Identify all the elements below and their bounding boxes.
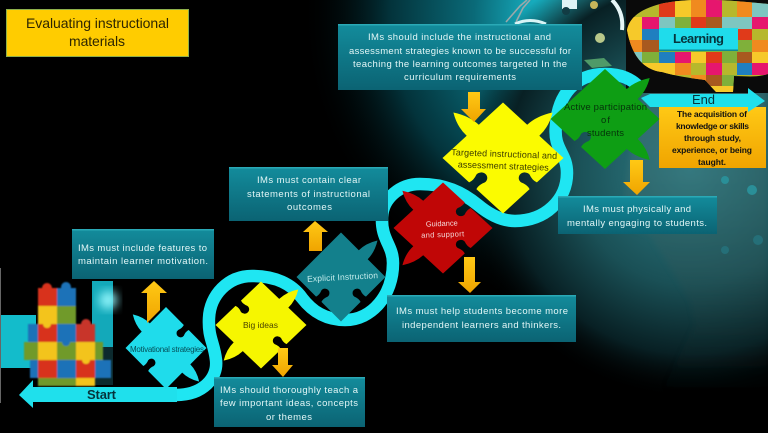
serpentine path ribbon bbox=[176, 74, 642, 395]
text box: learner motivation bbox=[72, 229, 214, 279]
definition box: experience, or being bbox=[672, 145, 752, 155]
text box: important ideas bbox=[214, 377, 365, 427]
definition box: knowledge or skills bbox=[676, 121, 749, 131]
start arrow: Start bbox=[87, 387, 117, 402]
definition box: The acquisition of bbox=[677, 109, 747, 119]
puzzle piece: guidance and support: and support bbox=[421, 229, 465, 240]
text box: instructional outcomes: outcomes bbox=[287, 202, 332, 213]
puzzle piece: big ideas bbox=[216, 282, 306, 368]
puzzle piece: targeted instructional and assessment strategies bbox=[442, 102, 564, 214]
definition box: through study, bbox=[684, 133, 741, 143]
text box: learner motivation: maintain learner motivation. bbox=[78, 256, 208, 267]
puzzle piece: explicit instruction: Explicit Instruction bbox=[307, 270, 378, 284]
text box: engaging to students: mentally engaging to students. bbox=[567, 218, 707, 229]
text box: important ideas: or themes bbox=[266, 412, 312, 423]
text box: instructional outcomes: statements of instructional bbox=[247, 189, 370, 200]
end arrow bbox=[641, 88, 765, 112]
puzzle piece: active participation of students: Active participation bbox=[564, 102, 647, 113]
text box: instructional and assessment strategies: teaching the learning outcomes targeted In the bbox=[353, 59, 567, 70]
puzzle piece: active participation of students: students bbox=[587, 128, 624, 139]
title box: materials bbox=[69, 33, 125, 49]
decorative medical tools at top bbox=[506, 0, 622, 68]
text box: instructional outcomes: IMs must contain clear bbox=[257, 175, 361, 186]
puzzle piece: targeted instructional and assessment strategies: Targeted instructional and bbox=[451, 147, 557, 161]
text box: instructional and assessment strategies: assessment strategies known to be successful for bbox=[349, 46, 571, 57]
arrow: big ideas down bbox=[272, 348, 293, 377]
text box: independent learners bbox=[387, 295, 576, 342]
puzzle piece: motivational strategies bbox=[126, 307, 206, 389]
puzzle piece: targeted instructional and assessment strategies: assessment strategies bbox=[458, 159, 549, 173]
arrow: targeted down bbox=[461, 92, 486, 122]
text box: instructional and assessment strategies: curriculum requirements bbox=[404, 72, 516, 83]
arrow: active participation down bbox=[623, 160, 650, 195]
text box: important ideas: IMs should thoroughly teach a bbox=[220, 385, 359, 396]
definition box: taught. bbox=[698, 157, 726, 167]
text box: independent learners: independent learners and thinkers. bbox=[402, 320, 561, 331]
left puzzle image bbox=[0, 268, 117, 403]
arrow: guidance down bbox=[458, 257, 481, 293]
text box: instructional outcomes bbox=[229, 167, 388, 221]
text box: instructional and assessment strategies: IMs should include the instructional and bbox=[368, 32, 551, 43]
puzzle piece: motivational strategies: Motivational strategies bbox=[130, 345, 204, 354]
text box: engaging to students bbox=[558, 196, 717, 234]
puzzle piece: guidance and support: Guidance bbox=[426, 218, 458, 229]
end arrow: End bbox=[692, 92, 715, 107]
text box: instructional and assessment strategies bbox=[338, 24, 582, 90]
text box: learner motivation: IMs must include features to bbox=[78, 243, 207, 254]
puzzle piece: guidance and support bbox=[394, 182, 492, 274]
start arrow bbox=[19, 380, 177, 408]
text box: engaging to students: IMs must physically and bbox=[583, 204, 691, 215]
arrow: explicit instruction up bbox=[303, 221, 328, 251]
puzzle piece: big ideas: Big ideas bbox=[243, 320, 278, 330]
puzzle piece: active participation of students: of bbox=[601, 115, 610, 126]
title box: Evaluating instructional bbox=[26, 15, 169, 31]
learning label bbox=[659, 28, 738, 51]
title box bbox=[6, 10, 188, 56]
brain puzzle image bbox=[626, 0, 768, 93]
definition box bbox=[659, 107, 766, 168]
learning label: Learning bbox=[673, 31, 724, 46]
text box: independent learners: IMs must help students become more bbox=[396, 306, 568, 317]
text box: important ideas: few important ideas, concepts bbox=[220, 398, 358, 409]
puzzle piece: explicit instruction bbox=[296, 232, 386, 322]
puzzle piece: active participation of students bbox=[550, 69, 660, 169]
arrow: motivational up bbox=[141, 281, 167, 323]
